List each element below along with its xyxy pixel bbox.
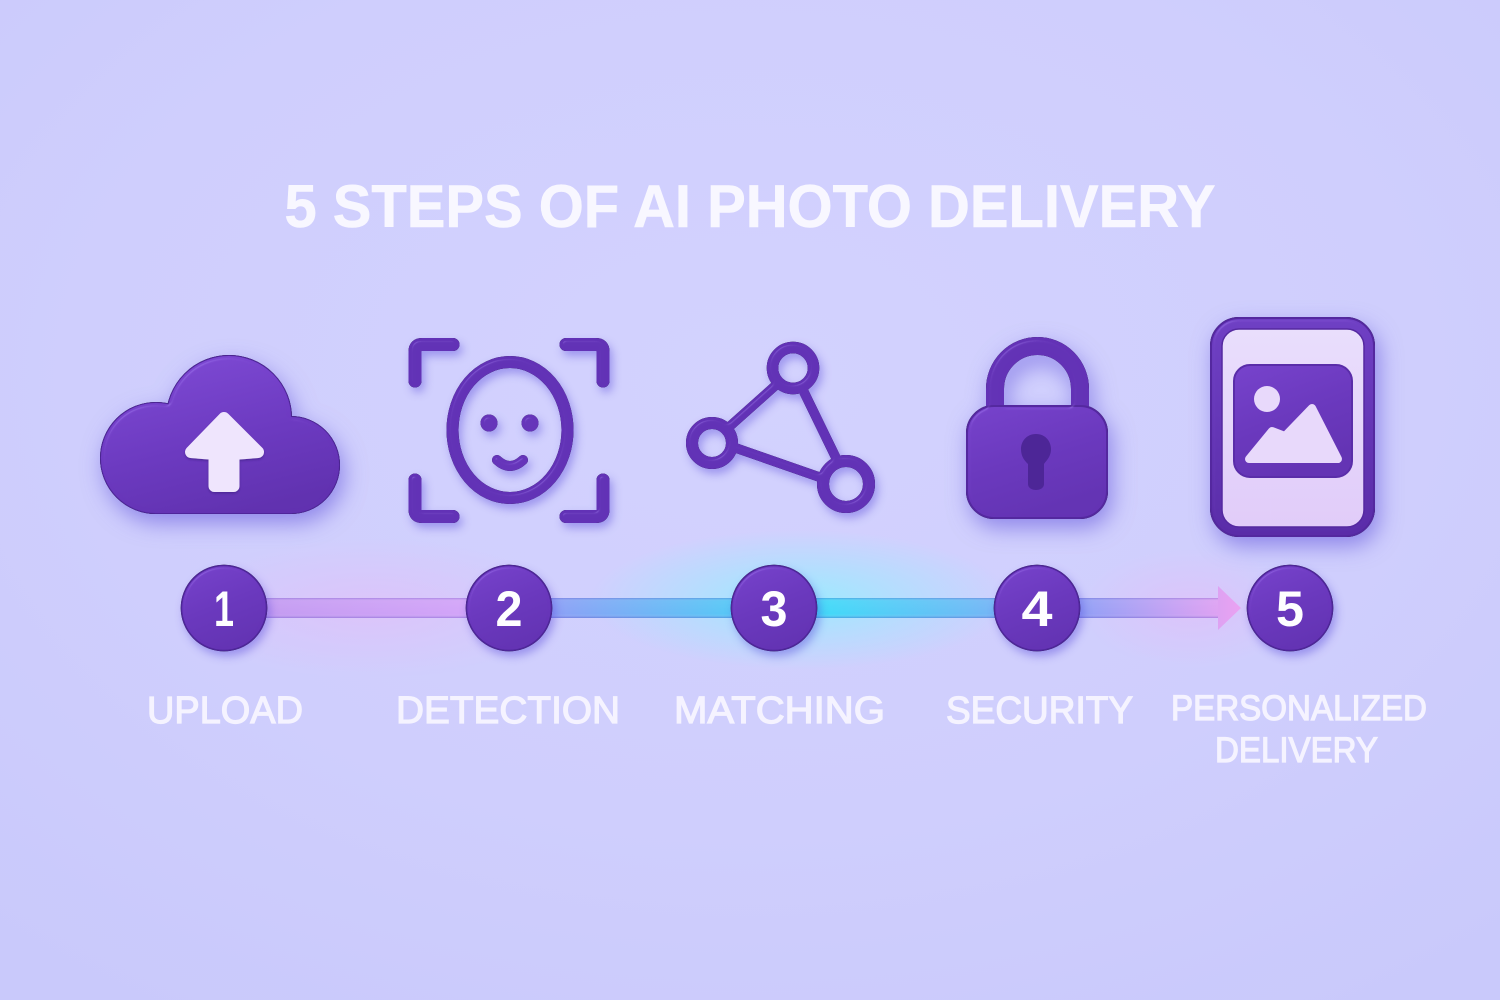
label: personalized delivery (1171, 689, 1427, 770)
card frame (1211, 318, 1374, 536)
label: personalized delivery: DELIVERY (1215, 731, 1378, 770)
icon: personalized photo card (1211, 318, 1374, 536)
sun (1254, 386, 1280, 412)
title: 5 STEPS OF AI PHOTO DELIVERY (284, 173, 1216, 240)
icon: network triangle (692, 348, 869, 507)
label: upload: UPLOAD (147, 690, 303, 732)
step 2 badge: 2 (496, 581, 522, 637)
step 4 badge: 4 (1022, 581, 1053, 637)
label: detection: DETECTION (396, 690, 620, 732)
glow: cyan centre (590, 530, 1010, 670)
connecting lines (729, 385, 838, 478)
shackle (995, 346, 1080, 412)
lock body (967, 406, 1107, 518)
icon: padlock (967, 346, 1107, 518)
step 1 badge: 1 (214, 581, 234, 637)
top node (772, 348, 814, 388)
label: personalized delivery: PERSONALIZED (1171, 689, 1427, 728)
cloud body (101, 356, 339, 513)
cloud outline (101, 356, 339, 513)
scan frame corners (415, 344, 603, 516)
step 4 badge (994, 566, 1080, 650)
keyhole (1021, 434, 1051, 490)
face outline (452, 362, 568, 498)
smile (497, 460, 523, 466)
connector bar with arrow (250, 586, 1241, 630)
right node (823, 461, 869, 507)
label: security: SECURITY (946, 690, 1133, 732)
connector bar shading (250, 598, 1218, 618)
step labels (147, 689, 1427, 770)
glow: pink left (170, 538, 570, 678)
step 3 badge: 3 (760, 581, 788, 637)
glow: pink right (1080, 548, 1300, 668)
left node (692, 423, 732, 463)
step 3 badge (732, 566, 816, 650)
step 5 badge (1248, 566, 1332, 650)
label: matching: MATCHING (674, 690, 885, 732)
card screen (1222, 329, 1364, 527)
step 2 badge (466, 566, 552, 650)
icon: cloud upload (101, 356, 339, 513)
progress timeline (170, 530, 1332, 678)
step 1 badge (182, 566, 266, 650)
eyes (480, 414, 538, 432)
icon: face detection (415, 344, 603, 516)
photo tile (1234, 365, 1352, 477)
mountains (1249, 408, 1338, 459)
icon: upload arrow (191, 418, 258, 486)
step 5 badge: 5 (1276, 581, 1304, 637)
